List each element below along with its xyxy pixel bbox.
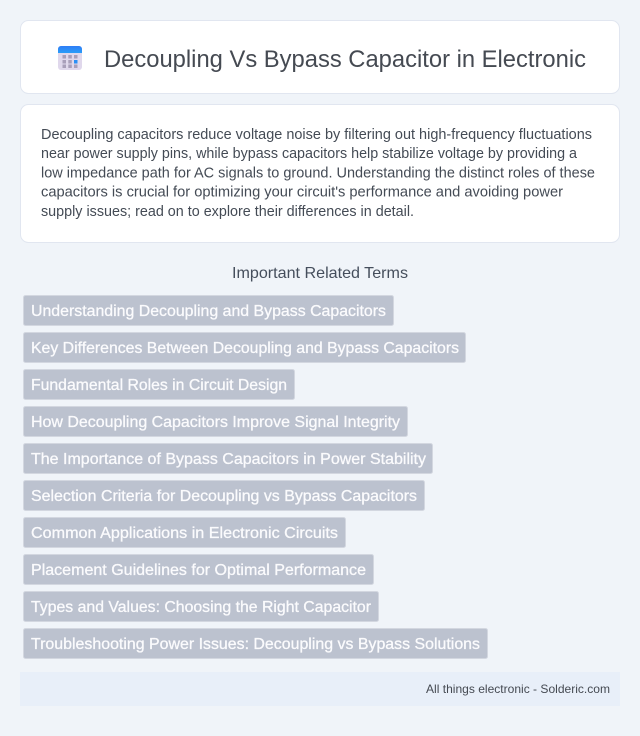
tag 9 (24, 592, 378, 622)
tag 1 (24, 296, 394, 326)
tag 6 (24, 480, 424, 510)
tag 9: Types and Values: Choosing the Right Capacitor (31, 599, 372, 616)
tag 6: Selection Criteria for Decoupling vs Bypass Capacitors (31, 488, 417, 505)
icon: calendar (58, 46, 82, 70)
tag 2: Key Differences Between Decoupling and Bypass Capacitors (31, 340, 459, 357)
description text (41, 127, 595, 220)
tag 7: Common Applications in Electronic Circuits (31, 525, 338, 542)
tag 10: Troubleshooting Power Issues: Decoupling vs Bypass Solutions (31, 636, 480, 653)
tag 8: Placement Guidelines for Optimal Performance (31, 562, 366, 579)
tag 3 (24, 370, 294, 400)
description text: low impedance path for AC signals to ground. Understanding the distinct roles of these (41, 166, 595, 182)
tag 3: Fundamental Roles in Circuit Design (31, 377, 287, 394)
tag 4: How Decoupling Capacitors Improve Signal Integrity (31, 414, 400, 431)
tag 1: Understanding Decoupling and Bypass Capacitors (31, 303, 386, 320)
description text: capacitors is crucial for optimizing your circuit's performance and avoiding power (41, 184, 563, 200)
footer: All things electronic - Solderic.com (426, 682, 610, 696)
tag 2 (24, 332, 466, 362)
tag 8 (24, 554, 374, 584)
header panel (20, 20, 620, 94)
description text: supply issues; read on to explore their differences in detail. (41, 204, 414, 220)
tag 5 (24, 444, 432, 474)
tag 4 (24, 406, 408, 436)
panel: description (20, 104, 620, 242)
description text: Decoupling capacitors reduce voltage noise by filtering out high-frequency fluctuations (41, 127, 592, 143)
footer (20, 672, 620, 706)
description text: near power supply pins, while bypass capacitors help stabilize voltage by providing a (41, 146, 577, 162)
tag 10 (24, 628, 488, 658)
heading: related terms: Important Related Terms (232, 265, 408, 282)
term tags (24, 296, 488, 658)
tag 5: The Importance of Bypass Capacitors in Power Stability (31, 451, 426, 468)
tag 7 (24, 518, 346, 548)
title: Decoupling Vs Bypass Capacitor in Electronic (104, 46, 586, 73)
